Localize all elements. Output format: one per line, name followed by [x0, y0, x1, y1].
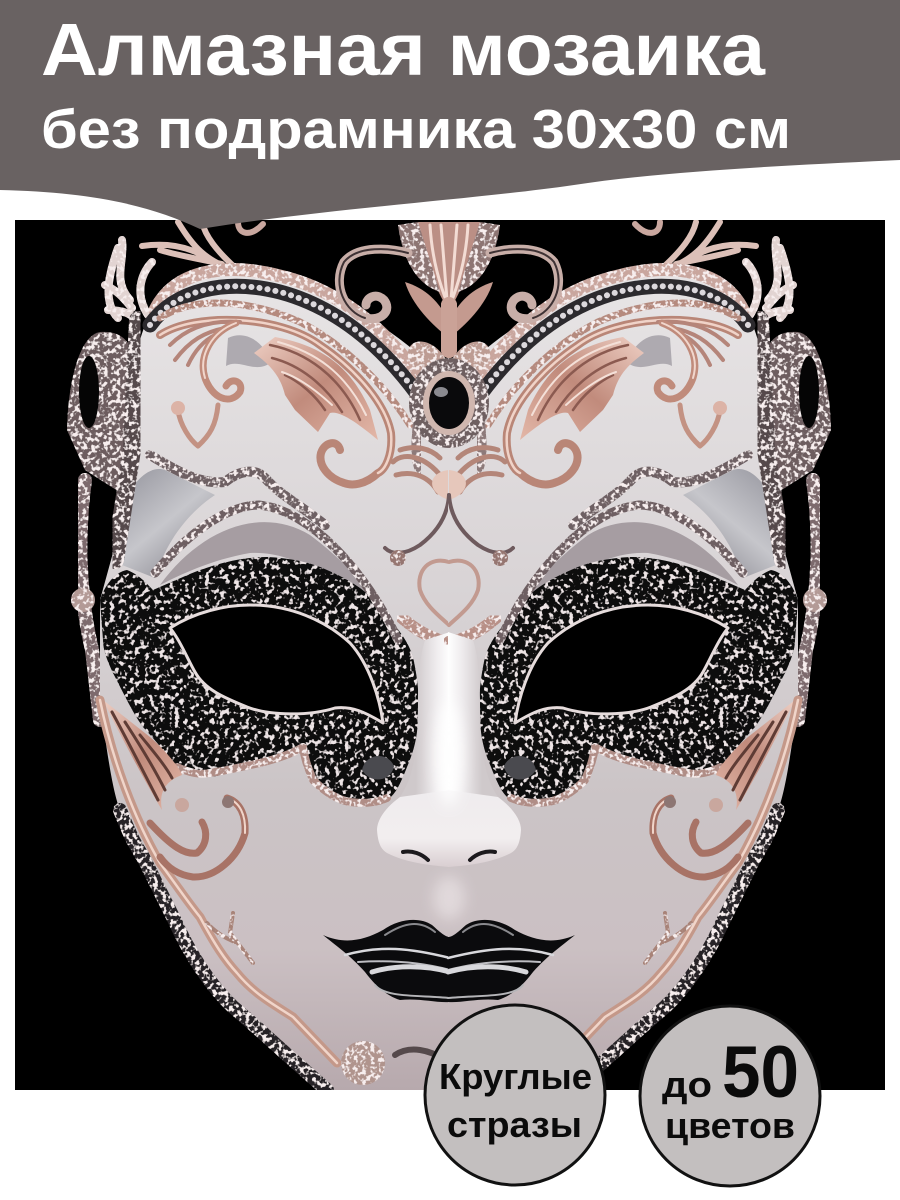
- black picture background: [15, 220, 885, 1090]
- badge: round rhinestones: стразы: [447, 1104, 582, 1145]
- mask: left half: [67, 222, 450, 1095]
- title: Алмазная мозаика: [41, 8, 766, 91]
- badge: up to 50 colours: 50: [722, 1032, 799, 1113]
- panel: mask picture on black: [15, 220, 885, 1095]
- nose highlight: [434, 729, 464, 802]
- badge: up to 50 colours: до: [662, 1064, 712, 1105]
- badge: round rhinestones: [425, 1005, 605, 1185]
- central black jewel: [409, 358, 489, 448]
- subtitle: без подрамника 30х30 см: [41, 98, 791, 160]
- mask: right half: [448, 222, 831, 1095]
- badge: up to 50 colours: цветов: [665, 1105, 795, 1146]
- badge: up to 50 colours: [640, 1006, 820, 1186]
- philtrum highlight: [433, 876, 465, 920]
- badge: round rhinestones: Круглые: [439, 1056, 592, 1097]
- header banner: [0, 0, 900, 229]
